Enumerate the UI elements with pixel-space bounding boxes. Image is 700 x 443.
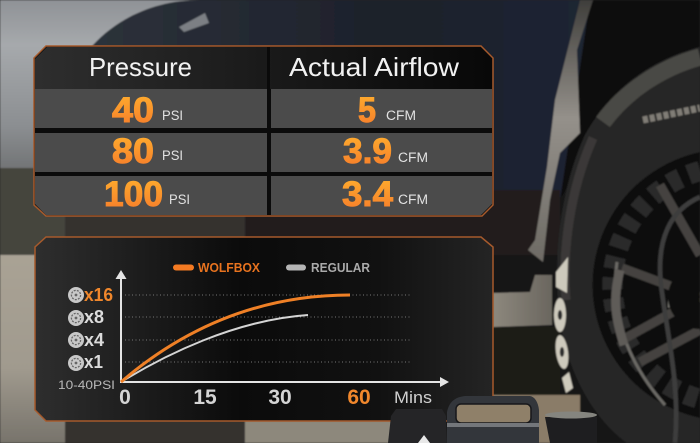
value: 40 PSI xyxy=(112,91,183,130)
legend: REGULAR xyxy=(286,261,370,275)
value: 3.4 CFM: CFM xyxy=(398,192,428,207)
compressor left cap xyxy=(388,409,447,443)
heading: Pressure: Pressure xyxy=(89,52,192,82)
tyre tread highlight xyxy=(603,57,700,122)
panel: pressure and airflow table xyxy=(34,46,493,216)
row cells xyxy=(35,89,492,215)
x-axis tick labels: 60 xyxy=(347,386,371,409)
value: 100 PSI xyxy=(104,175,190,214)
gravel ground xyxy=(0,255,130,443)
y-axis label: x4: x4 xyxy=(84,330,104,350)
rocker sill xyxy=(493,275,552,327)
compressor cap warning mark xyxy=(418,435,430,443)
value: 3.9 CFM: CFM xyxy=(398,150,428,165)
tyre sidewall markings xyxy=(554,257,573,393)
sky xyxy=(0,0,240,180)
wheel rim xyxy=(592,152,700,418)
value: 3.4 CFM: 3.4 xyxy=(342,175,394,214)
legend xyxy=(173,261,370,275)
tyre top lettering xyxy=(643,108,700,120)
x-axis tick labels: 0 xyxy=(119,386,131,409)
mud-covered fender xyxy=(528,0,593,262)
curve: wolfbox xyxy=(121,295,350,382)
value: 5 CFM xyxy=(358,91,416,130)
handle lower bar xyxy=(447,423,539,427)
x-axis tick labels: 30 xyxy=(268,386,292,409)
lower body xyxy=(90,190,560,255)
y-axis label: x8 xyxy=(68,307,104,327)
curve: regular xyxy=(121,315,308,382)
y-axis label: x1: x1 xyxy=(84,352,103,372)
tyre xyxy=(557,47,700,443)
value: 80 PSI: 80 xyxy=(112,132,154,171)
tyre shoulder highlight xyxy=(565,138,593,300)
rim spoke highlight xyxy=(668,298,688,308)
value: 80 PSI xyxy=(112,132,183,171)
value: 100 PSI: 100 xyxy=(104,175,163,214)
rim crescent xyxy=(616,270,624,345)
rim spokes xyxy=(622,185,700,362)
value: 5 CFM: 5 xyxy=(358,91,376,130)
value: 5 CFM: CFM xyxy=(386,108,416,123)
legend: WOLFBOX: WOLFBOX xyxy=(198,261,261,275)
value: 100 PSI: PSI xyxy=(169,192,190,207)
compressor right cap xyxy=(545,412,597,443)
ground at the bottom xyxy=(245,421,392,443)
value: 3.9 CFM xyxy=(343,132,428,171)
table base xyxy=(34,46,493,216)
chart background xyxy=(35,237,493,421)
panel: inflation time chart xyxy=(35,237,493,421)
header background xyxy=(35,47,492,89)
rim light crescent xyxy=(615,262,665,405)
value: 40 PSI: PSI xyxy=(162,108,183,123)
heading: Actual Airflow: Actual Airflow xyxy=(289,52,459,82)
handle opening xyxy=(456,404,531,423)
legend: REGULAR: REGULAR xyxy=(311,261,370,275)
chart axes xyxy=(116,270,449,387)
y-axis label: x16 xyxy=(68,285,113,305)
value: 3.9 CFM: 3.9 xyxy=(343,132,392,171)
sidewall lettering holes xyxy=(558,310,564,357)
truck door xyxy=(92,0,600,220)
shadow under the truck xyxy=(240,255,560,395)
x-axis tick labels: 15 xyxy=(193,386,217,409)
y-axis label: x1 xyxy=(68,352,103,372)
value: 80 PSI: PSI xyxy=(162,148,183,163)
distant trees xyxy=(0,168,100,258)
wheel arch interior xyxy=(560,0,700,200)
door handle xyxy=(179,13,209,32)
y-axis label: x8: x8 xyxy=(84,307,104,327)
value: 3.4 CFM xyxy=(342,175,428,214)
y-axis label: x16: x16 xyxy=(84,285,113,305)
front wheel at left xyxy=(65,216,245,443)
value: 40 PSI: 40 xyxy=(112,91,154,130)
product: air compressor at bottom xyxy=(388,396,597,443)
y-axis base label: 10-40PSI xyxy=(58,378,115,392)
rim outer ring with bolts xyxy=(612,171,700,399)
compressor handle xyxy=(447,396,539,443)
rim hub xyxy=(668,265,700,329)
air hose xyxy=(660,197,700,443)
y-axis label: x4 xyxy=(68,330,104,350)
x-axis unit: Mins xyxy=(394,388,432,407)
x-axis tick labels xyxy=(119,386,371,409)
